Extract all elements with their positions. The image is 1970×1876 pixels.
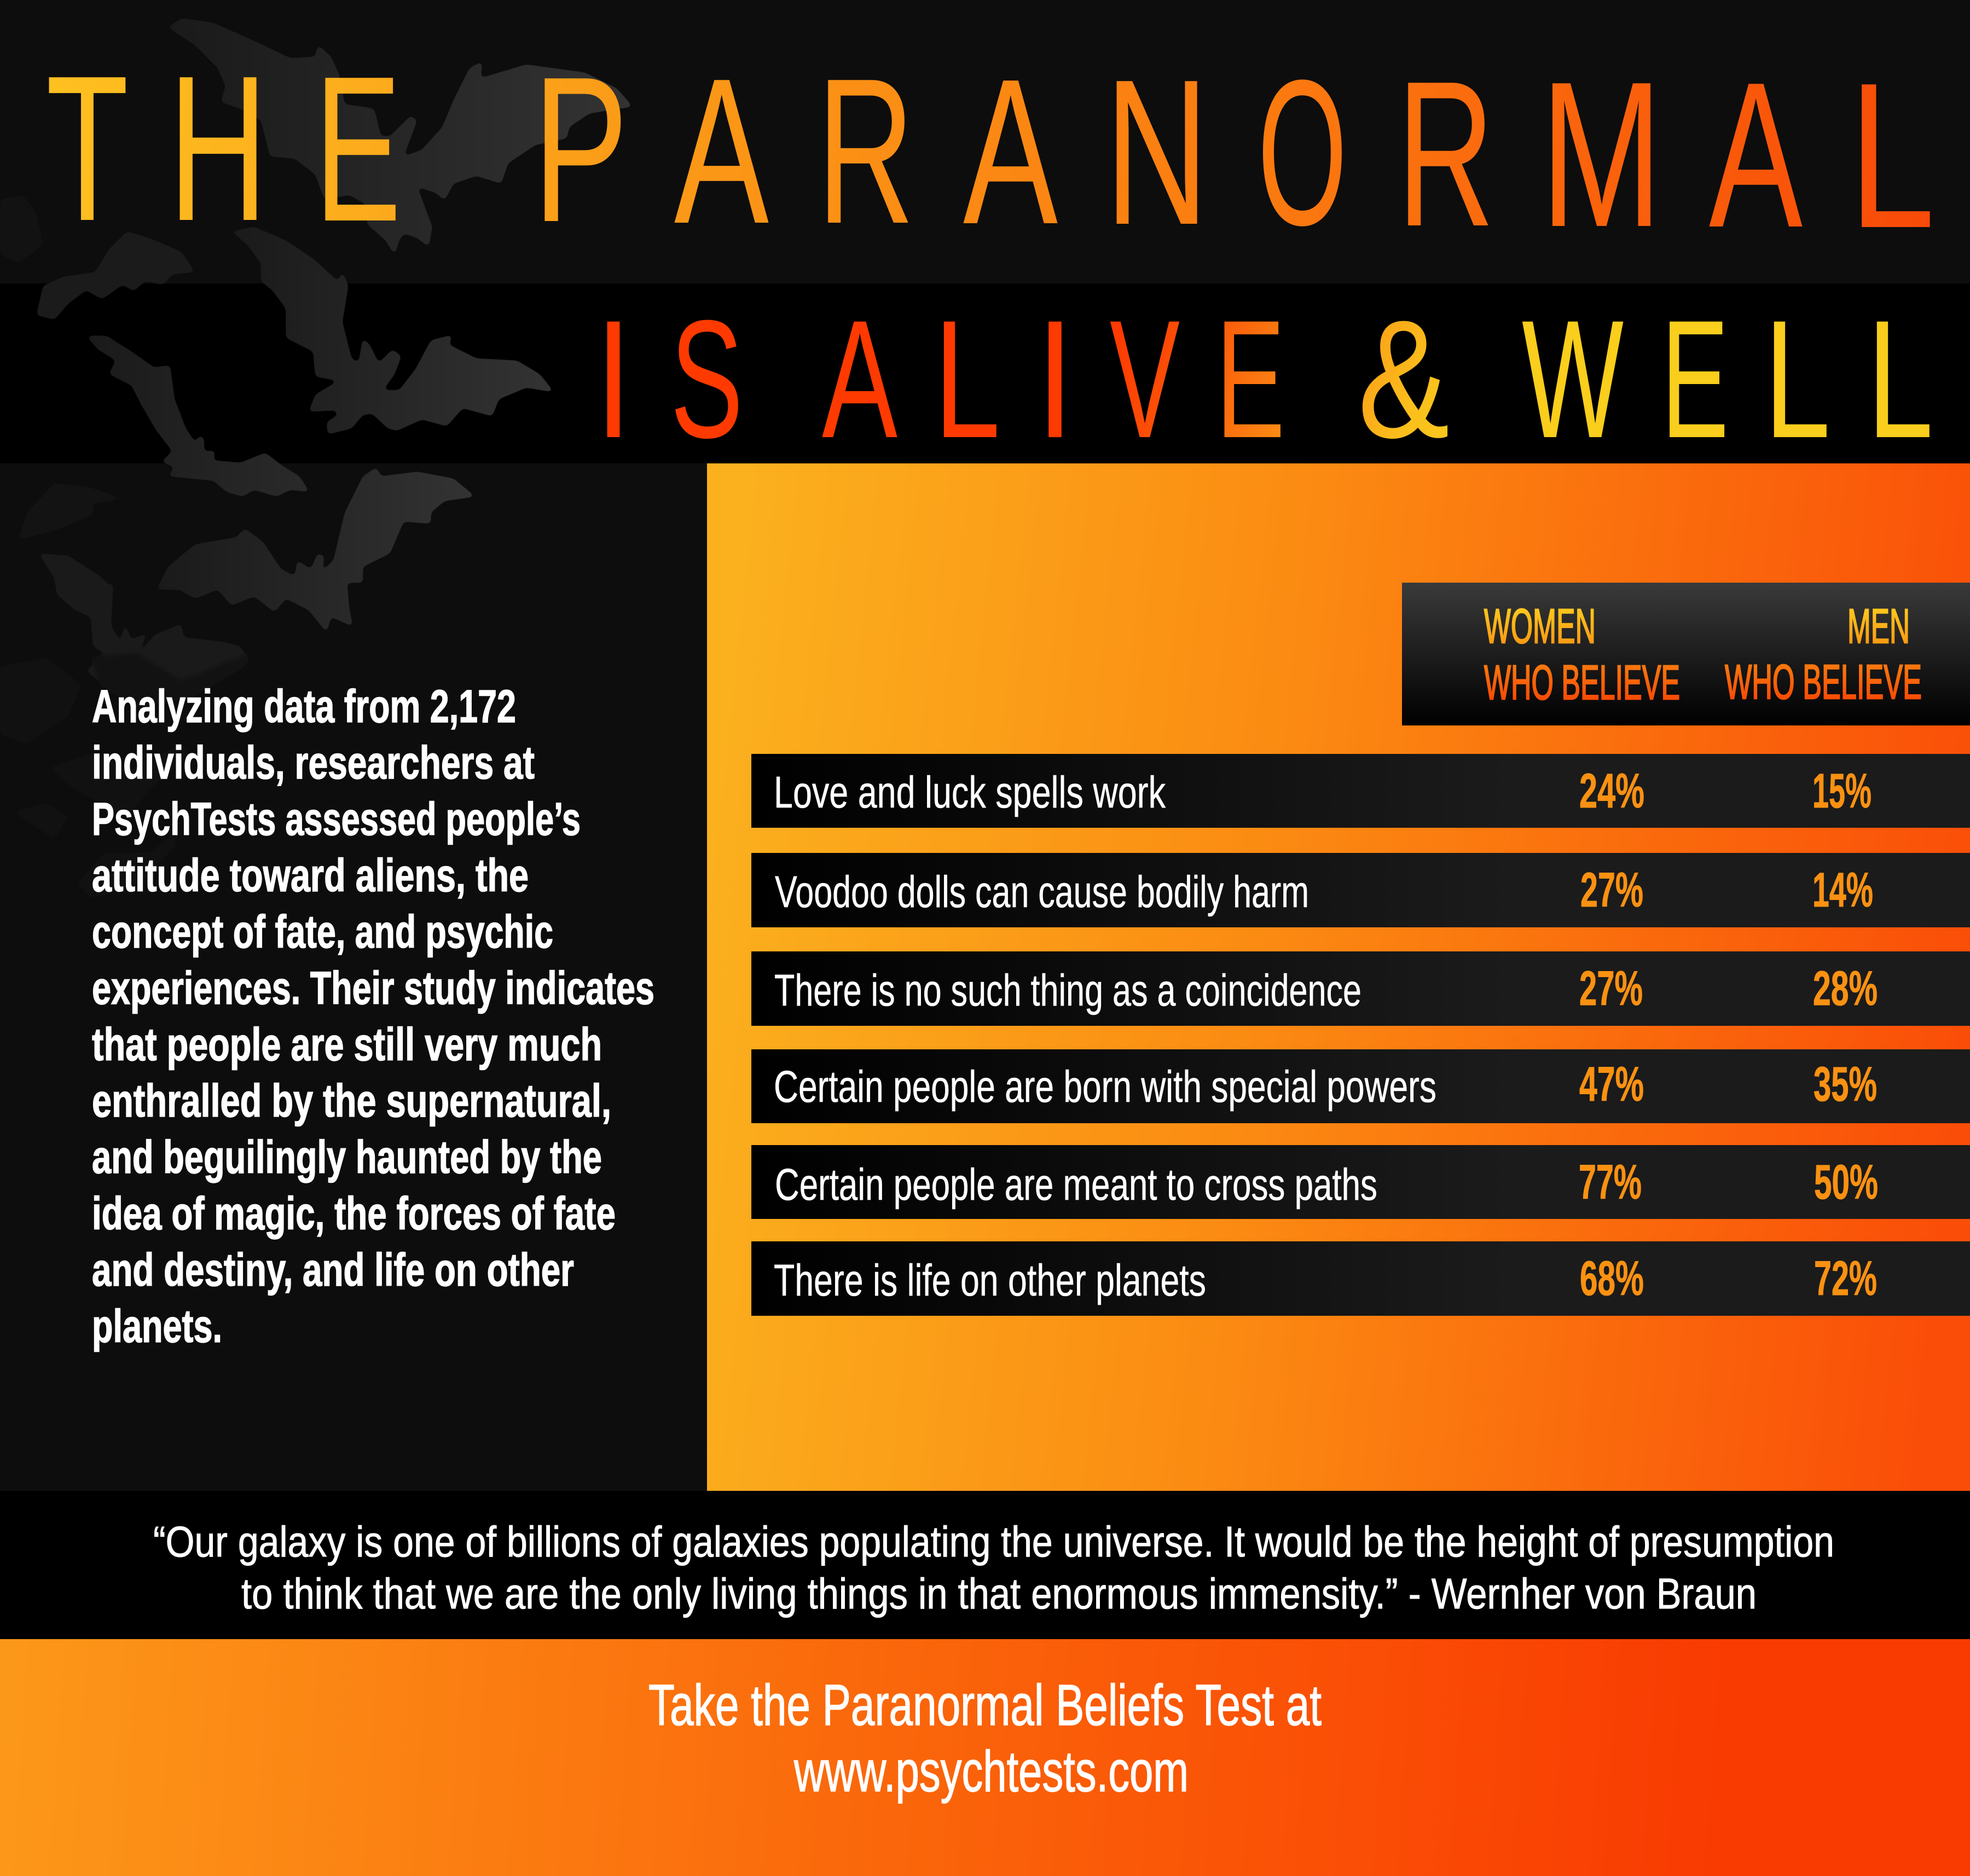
title: THE PARANORMAL: N — [1105, 37, 1209, 268]
row: cross paths — [751, 1145, 1970, 1219]
row: love and luck spells — [751, 754, 1970, 828]
row: love and luck spells: 15% — [1812, 763, 1872, 818]
row: life on other planets: 72% — [1814, 1251, 1877, 1305]
row: no coincidence: There is no such thing as a coincidence — [774, 966, 1361, 1015]
title: IS ALIVE & WELL: L — [1764, 286, 1830, 473]
title: THE PARANORMAL: A — [963, 36, 1058, 268]
title: IS ALIVE & WELL: E — [1661, 286, 1729, 473]
intro text block: idea of magic, the forces of fate — [92, 1188, 616, 1239]
title: THE PARANORMAL — [46, 33, 1935, 271]
row: cross paths: 77% — [1579, 1154, 1642, 1209]
title: THE PARANORMAL: O — [1258, 37, 1347, 269]
title: THE PARANORMAL: P — [533, 34, 628, 265]
intro text block: enthralled by the supernatural, — [92, 1075, 611, 1126]
title: THE PARANORMAL: A — [674, 36, 769, 267]
row: special powers: 35% — [1813, 1056, 1877, 1111]
title: IS ALIVE & WELL: V — [1110, 286, 1180, 473]
title: THE PARANORMAL: E — [315, 33, 401, 265]
row: cross paths: Certain people are meant to cross paths — [775, 1160, 1377, 1210]
row: special powers — [751, 1049, 1970, 1123]
title: IS ALIVE & WELL: L — [1867, 286, 1933, 473]
title: IS ALIVE & WELL: S — [670, 286, 743, 473]
quote band — [0, 1491, 1970, 1639]
row: special powers: Certain people are born with special powers — [774, 1062, 1436, 1112]
table header: women and men who believe: WHO BELIEVE — [1484, 655, 1680, 710]
table header: women and men who believe: WOMEN — [1484, 599, 1596, 653]
title: THE PARANORMAL: T — [46, 33, 129, 264]
table header: women and men who believe — [1402, 583, 1970, 725]
intro text block — [92, 681, 654, 1352]
title: THE PARANORMAL: M — [1540, 39, 1662, 270]
title: THE PARANORMAL: A — [1709, 39, 1803, 271]
title: IS ALIVE & WELL: L — [934, 286, 1000, 473]
intro text block: PsychTests assessed people’s — [92, 793, 581, 845]
row: cross paths: 50% — [1814, 1154, 1878, 1209]
row: voodoo dolls: 14% — [1812, 862, 1873, 917]
row: special powers: 47% — [1579, 1056, 1644, 1111]
intro text block: that people are still very much — [92, 1019, 602, 1070]
footer call to action: Take the Paranormal Beliefs Test at — [648, 1673, 1322, 1738]
row: life on other planets: There is life on other planets — [774, 1256, 1206, 1305]
title: IS ALIVE & WELL: I — [1036, 286, 1074, 473]
title: IS ALIVE & WELL: W — [1522, 286, 1625, 473]
title: THE PARANORMAL: H — [169, 33, 268, 264]
footer call to action: www.psychtests.com — [793, 1739, 1189, 1804]
intro text block: Analyzing data from 2,172 — [92, 681, 516, 732]
row: no coincidence: 27% — [1579, 961, 1643, 1015]
title: THE PARANORMAL: R — [1397, 38, 1494, 270]
intro text block: attitude toward aliens, the — [92, 850, 529, 901]
row: voodoo dolls: 27% — [1580, 862, 1643, 917]
table header: women and men who believe: MEN — [1847, 599, 1910, 653]
row: love and luck spells: Love and luck spells work — [774, 768, 1166, 817]
intro text block: planets. — [92, 1300, 222, 1352]
row: life on other planets — [751, 1241, 1970, 1316]
intro text block: individuals, researchers at — [92, 737, 535, 788]
row: no coincidence: 28% — [1813, 961, 1878, 1015]
intro text block: experiences. Their study indicates — [92, 962, 654, 1014]
bat flock silhouettes — [0, 18, 633, 898]
intro text block: and beguilingly haunted by the — [92, 1131, 602, 1183]
title: IS ALIVE & WELL: & — [1358, 286, 1450, 473]
row: love and luck spells: 24% — [1579, 763, 1644, 818]
intro text block: concept of fate, and psychic — [92, 906, 553, 957]
footer call to action — [0, 1639, 1970, 1876]
title: IS ALIVE & WELL — [595, 286, 1933, 473]
quote band: to think that we are the only living things in that enormous immensity.” - Wernher von Braun — [241, 1569, 1757, 1618]
row: life on other planets: 68% — [1580, 1251, 1644, 1305]
title: IS ALIVE & WELL: A — [822, 286, 898, 473]
row: voodoo dolls — [751, 853, 1970, 927]
title band: is alive and well background — [0, 283, 1970, 463]
row: voodoo dolls: Voodoo dolls can cause bodily harm — [775, 867, 1309, 917]
row: no coincidence — [751, 951, 1970, 1026]
panel: survey table — [707, 463, 1970, 1491]
title: THE PARANORMAL: R — [817, 36, 914, 267]
intro text block: and destiny, and life on other — [92, 1244, 574, 1296]
title: THE PARANORMAL: L — [1849, 40, 1935, 271]
title: IS ALIVE & WELL: I — [595, 286, 632, 473]
title: IS ALIVE & WELL: E — [1216, 286, 1285, 473]
